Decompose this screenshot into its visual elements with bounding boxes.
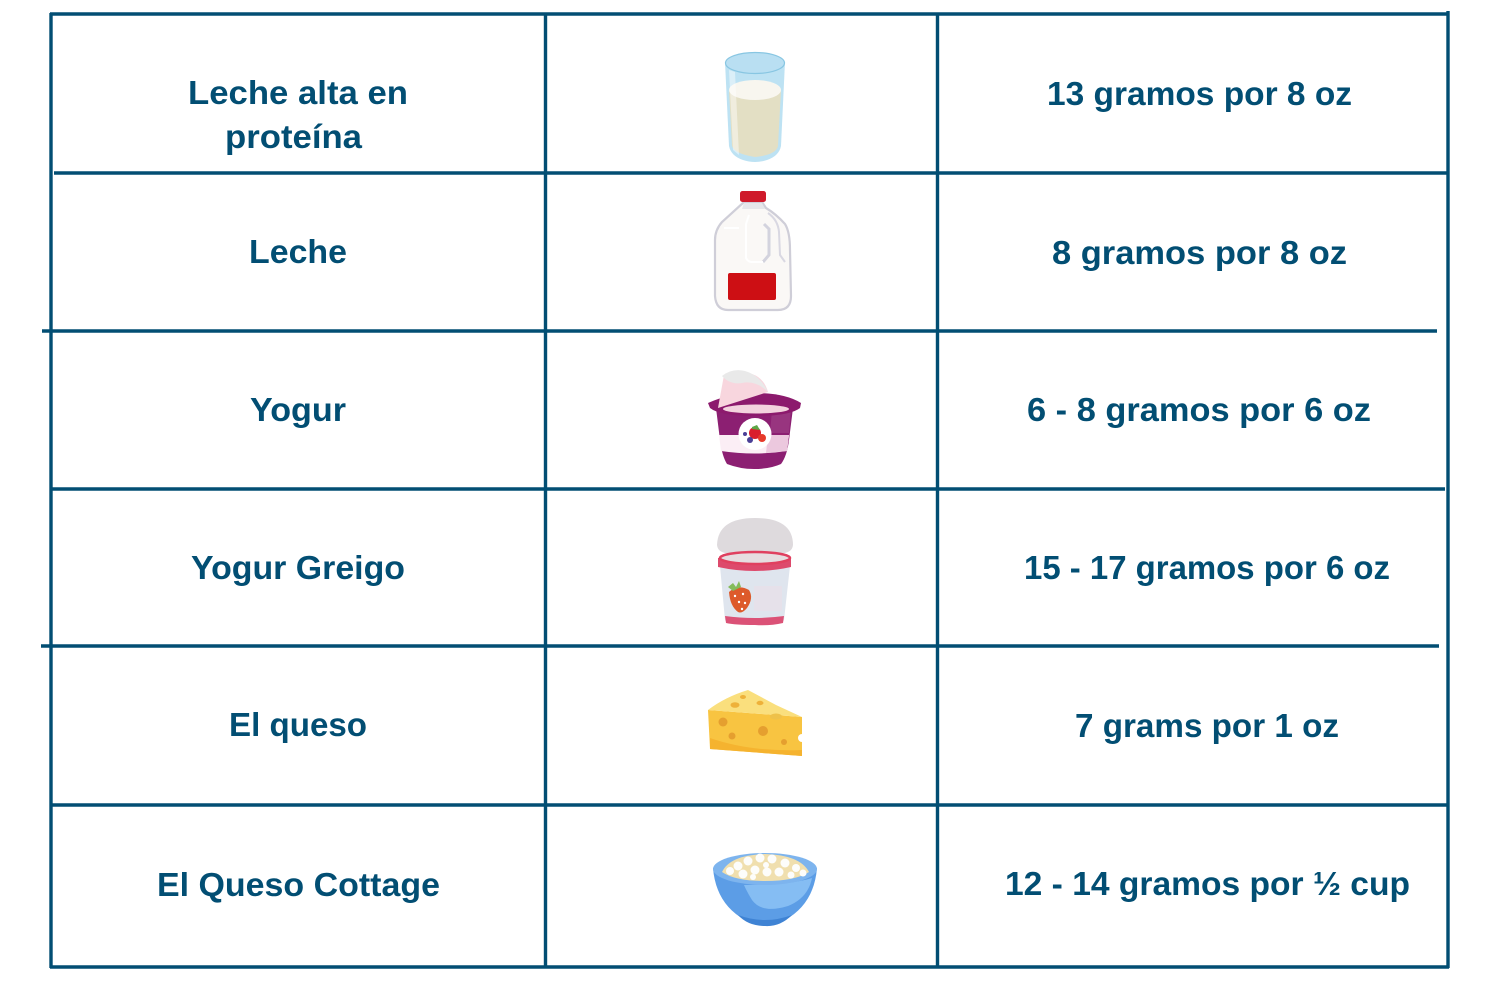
row 3 value: 6 - 8 gramos por 6 oz [1027, 391, 1371, 428]
icon: milk jug [715, 191, 791, 310]
icon: wedge of cheese [708, 690, 802, 756]
row 6 label: El Queso Cottage: El Queso Cottage [157, 866, 440, 903]
row 4 label: Yogur Griego: Yogur Greigo [191, 549, 405, 586]
icon: glass of milk [725, 52, 785, 162]
row 5 value: 7 grams por 1 oz [1075, 707, 1339, 744]
row 4 value: 15 - 17 gramos por 6 oz [1024, 549, 1390, 586]
row 2 value: 8 gramos por 8 oz [1052, 234, 1347, 271]
row 6 value: 12 - 14 gramos por ½ cup [1005, 865, 1410, 902]
icon: strawberry Greek yogurt cup [717, 518, 793, 625]
icon: bowl of cottage cheese [713, 853, 817, 926]
row 2 label: Leche: Leche [249, 233, 347, 270]
row 5 label: El queso: El queso [229, 706, 367, 743]
row 1 label: Leche alta en proteína: proteína [225, 118, 363, 155]
row 1 label: Leche alta en proteína [188, 74, 408, 155]
row 1 value: 13 gramos por 8 oz [1047, 75, 1352, 112]
icon: berry yogurt cup [708, 370, 801, 469]
row 1 label: Leche alta en proteína: Leche alta en [188, 74, 408, 111]
row 3 label: Yogur: Yogur [250, 391, 346, 428]
